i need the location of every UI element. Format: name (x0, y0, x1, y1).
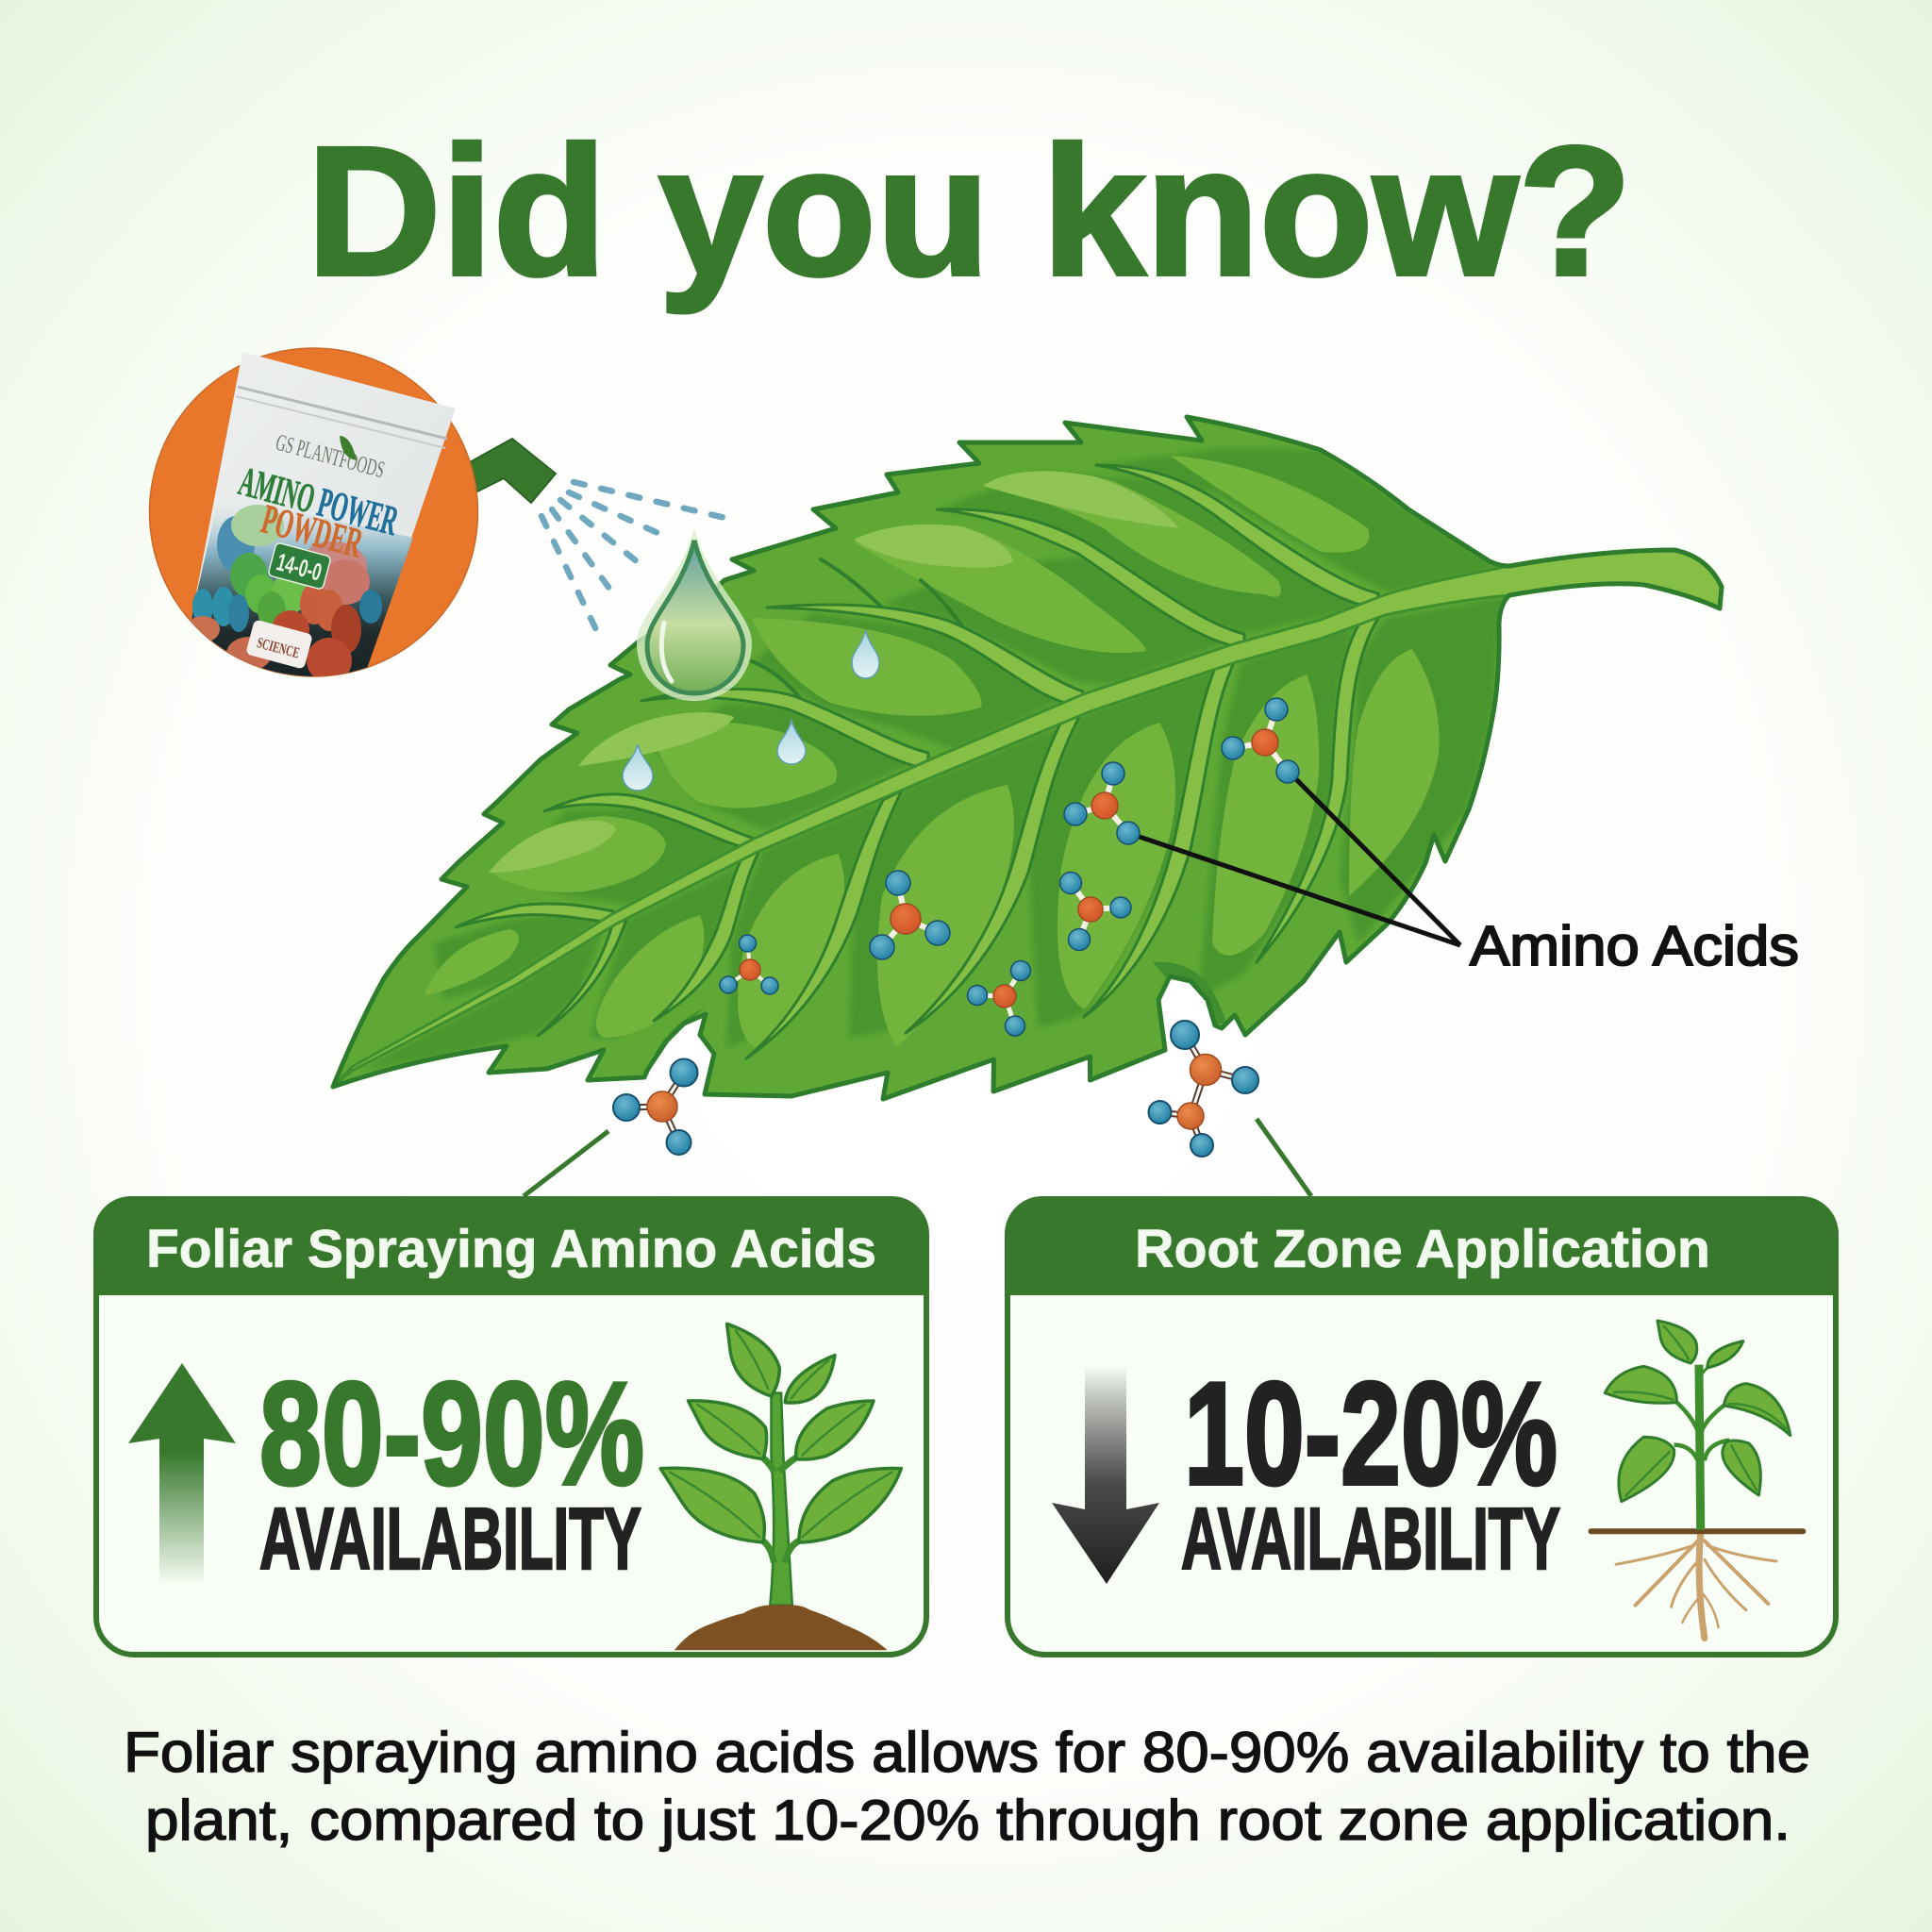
molecule 3 (1060, 872, 1131, 951)
orange circle (149, 348, 477, 676)
pouch white label: SCIENCE (255, 635, 301, 662)
stat label: AVAILABILITY (259, 1490, 641, 1588)
up arrow (128, 1363, 236, 1585)
spray droplets (541, 482, 729, 640)
lower lateral veins (538, 615, 1380, 1058)
seedling leaf veins (669, 1330, 893, 1538)
summary line 2: plant, compared to just 10-20% through root zone application. (145, 1789, 1790, 1852)
title: Did you know? (307, 108, 1632, 314)
icon: small droplets (623, 630, 879, 791)
molecule 6 (720, 935, 778, 994)
pouch white label (245, 619, 313, 670)
icon: plant with roots (1591, 1321, 1803, 1639)
molecule 1 (1222, 698, 1299, 783)
mid-tone patches (425, 456, 1440, 1047)
summary line 1: Foliar spraying amino acids allows for 80-90% availability to the (124, 1721, 1810, 1784)
pouch NPK badge (268, 542, 331, 590)
molecule 4 (870, 871, 950, 959)
icon: seedling in soil (660, 1324, 901, 1650)
panel body (1008, 1199, 1836, 1655)
dark wedges (358, 448, 1509, 1071)
icon: spray nozzle (470, 439, 556, 503)
panel body (96, 1199, 926, 1655)
molecule below leaf: left (613, 1058, 698, 1155)
seedling stem (770, 1393, 792, 1606)
icon: large droplet (637, 528, 752, 701)
pouch leaf logo (340, 436, 357, 460)
pouch brand text: GS PLANTFOODS (273, 430, 387, 483)
molecule 2 (1064, 762, 1140, 844)
pouch product name: AMINO POWER (234, 458, 404, 544)
roots (1616, 1533, 1776, 1639)
plant leaves (1605, 1321, 1790, 1502)
panel heading: Foliar Spraying Amino Acids (146, 1219, 876, 1279)
panel header (93, 1196, 929, 1295)
leaf blade base (333, 417, 1509, 1099)
ground line (1591, 1528, 1803, 1534)
light highlights (489, 471, 1179, 873)
pouch NPK badge: 14-0-0 (274, 547, 325, 587)
soil mound (675, 1605, 888, 1650)
product pouch (184, 352, 456, 683)
summary text (124, 1721, 1810, 1852)
leaf twigs (752, 559, 967, 698)
plant stem (1674, 1365, 1729, 1530)
connector lines to panels (524, 1119, 1311, 1196)
plant leaf veins (1613, 1325, 1787, 1497)
down arrow (1052, 1365, 1159, 1584)
upper lateral veins (456, 465, 1378, 927)
pouch powder label: POWDER (257, 495, 368, 567)
panel header (1005, 1196, 1839, 1295)
seedling branches (763, 1457, 799, 1563)
molecule below leaf: right (1149, 1021, 1258, 1157)
stat: 10-20%: 10-20% (1184, 1352, 1557, 1515)
notch folds (655, 962, 1225, 1054)
panel: root zone (1005, 1196, 1839, 1655)
leaf shading (358, 448, 1509, 1071)
molecule 5 (968, 960, 1030, 1036)
panel: foliar spraying (93, 1196, 929, 1655)
panel heading: Root Zone Application (1135, 1219, 1710, 1279)
leaf (333, 417, 1722, 1099)
amino acid callout lines (1128, 774, 1460, 945)
amino acid molecules on leaf (720, 698, 1299, 1036)
stat: 80-90%: 80-90% (259, 1352, 644, 1515)
stat label: AVAILABILITY (1181, 1490, 1560, 1588)
leaf outline (333, 417, 1722, 1099)
label: Amino Acids: Amino Acids (1470, 915, 1799, 977)
product circle (149, 348, 477, 683)
seedling leaves (660, 1324, 901, 1542)
midrib and petiole (333, 550, 1722, 1087)
